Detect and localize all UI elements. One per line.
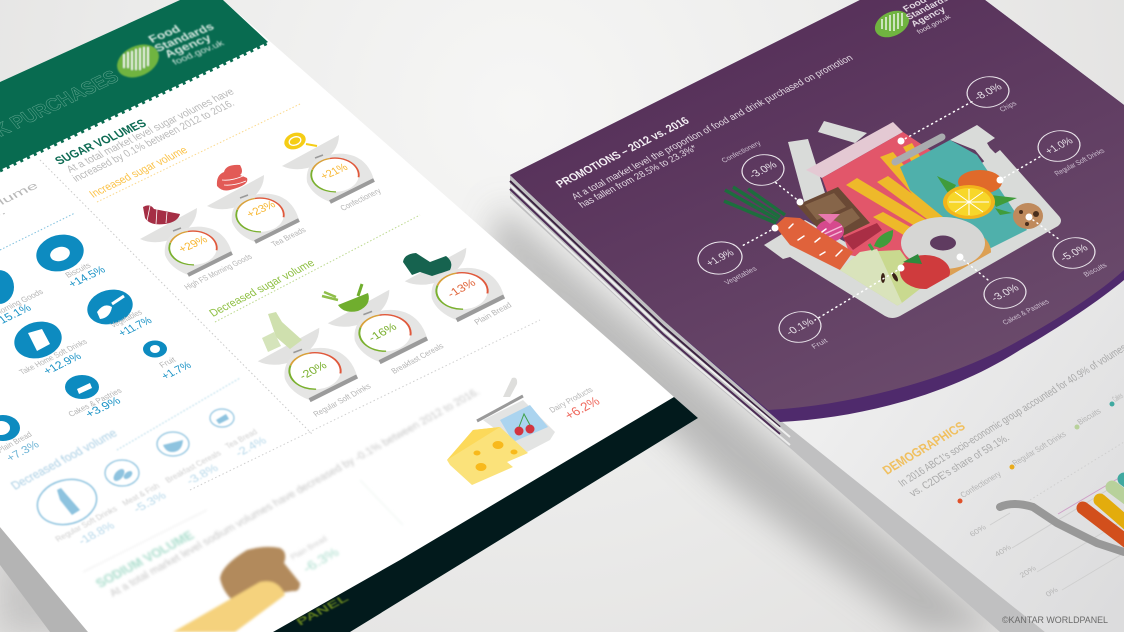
scale: regular soft drinks: Regular Soft Drinks [311, 381, 373, 418]
fruit item [143, 340, 194, 382]
cookie [1013, 203, 1043, 229]
legend [958, 391, 1124, 504]
scale: high FS morning goods: +29% [176, 233, 210, 255]
callout: fruit [771, 306, 830, 350]
callout: vegetables: +1.9% [703, 247, 737, 269]
FSA logo right: food.gov.uk [915, 13, 953, 35]
FSA logo [112, 20, 226, 84]
candy [816, 214, 844, 242]
FSA logo right [871, 0, 953, 42]
callout: chips: Chips [998, 100, 1018, 113]
sodium volume section [83, 386, 482, 632]
take home soft drinks item: Take Home Soft Drinks [17, 337, 89, 376]
left sheet [0, 0, 698, 632]
promotions heading: PROMOTIONS – 2012 vs. 2016 [553, 114, 692, 190]
callout: chips [959, 71, 1018, 113]
scale: confectionery: Confectionery [338, 186, 383, 212]
regular soft drinks item: Regular Soft Drinks [53, 504, 119, 543]
scale: high FS morning goods: High FS Morning Goods [182, 252, 254, 291]
demographics text [896, 342, 1124, 499]
scale: tea breads: Tea Breads [269, 225, 308, 248]
cart handle [1000, 504, 1124, 552]
callout: regular soft drinks [1030, 125, 1106, 177]
regular soft drinks item: -18.8% [76, 519, 117, 547]
fries [846, 143, 943, 235]
take home soft drinks item [10, 317, 89, 377]
FSA logo right: Agency [909, 5, 948, 29]
sodium heading: SODIUM VOLUME [92, 528, 197, 590]
breakfast cereals item: Breakfast Cereals [163, 448, 223, 484]
icon: yogurt pot [477, 378, 555, 452]
plain bread item: +7.3% [4, 438, 42, 464]
dark red wrapper block [843, 223, 882, 250]
shopping basket illustration [724, 121, 1061, 318]
demographics text: vs. C2DE's share of 59.1%. [907, 432, 1012, 499]
callout: fruit: Fruit [810, 337, 830, 350]
dairy products [447, 378, 602, 485]
promotions intro [570, 53, 855, 210]
sodium intro text: At a total market level sodium volumes have decreased by -0.1% between 2012 to 2016. [107, 386, 482, 599]
callout: biscuits: -5.0% [1057, 242, 1091, 264]
demographics section [879, 342, 1124, 598]
tea bread item: -2.4% [233, 434, 269, 459]
column divider [40, 160, 313, 435]
callout: biscuits [1045, 232, 1109, 278]
sugar intro text: At a total market level sugar volumes have [64, 86, 236, 175]
carton cap [895, 137, 942, 162]
carrot greens [724, 187, 785, 223]
callout: cakes and pastries: Cakes & Pastries [1001, 298, 1051, 326]
promotions intro: At a total market level the proportion of food and drink purchased on promotion [570, 53, 855, 202]
chips bag [806, 122, 931, 260]
dairy label: Dairy Products [547, 385, 595, 414]
plain bread value: -6.3% [299, 544, 342, 575]
doughnut [901, 217, 991, 276]
apple [840, 230, 925, 306]
callout: regular soft drinks: +1.0% [1042, 135, 1076, 157]
basket frame [764, 150, 1061, 318]
right stack of sheets [510, 0, 1124, 632]
chart axis labels: 60% [968, 523, 988, 538]
cakes and pastries item: +3.9% [83, 394, 123, 420]
decreased heading: Decreased sugar volume [207, 257, 317, 319]
plain bread label: Plain Bread [288, 534, 329, 561]
scale: breakfast cereals: -16% [366, 320, 399, 344]
callout: biscuits: Biscuits [1082, 261, 1109, 278]
increased food volume column [0, 180, 194, 464]
vegetables item [84, 285, 154, 339]
promotions intro: has fallen from 28.5% to 23.3%* [577, 143, 700, 210]
chart axis labels: 20% [1018, 564, 1038, 579]
legend: Biscuits [1075, 406, 1103, 426]
chart axis labels [968, 523, 1060, 598]
stack edge [510, 175, 1045, 632]
scale: regular soft drinks: -20% [297, 359, 330, 382]
purple hero dark band [510, 0, 1124, 422]
callout: cakes and pastries [976, 272, 1051, 326]
callout: confectionery [720, 139, 792, 191]
callout: vegetables: Vegetables [723, 265, 758, 286]
plain bread item [0, 415, 42, 464]
scale: breakfast cereals [322, 284, 446, 375]
promotion callouts [740, 100, 1060, 320]
legend: Confectionery [958, 469, 1003, 499]
scale: high FS morning goods [140, 205, 254, 291]
chart axis labels: 0% [1044, 586, 1060, 598]
photo credit: ©KANTAR WORLDPANEL [1002, 615, 1108, 626]
purple hero panel [510, 0, 1124, 410]
FSA logo: Standards [152, 20, 217, 54]
vegetables item: Vegetables [108, 308, 144, 329]
callout: vegetables [690, 236, 758, 286]
scale: plain bread: -13% [445, 276, 478, 300]
decreased food heading: Decreased food volume [8, 426, 120, 492]
sheet thickness edge [0, 527, 88, 632]
fruit item: +1.7% [159, 359, 194, 382]
legend: Regular Soft Drinks [1010, 429, 1068, 467]
FSA logo: food.gov.uk [170, 39, 226, 66]
footer dark band [273, 397, 698, 632]
teal drink carton [900, 140, 1027, 250]
meat and fish item: Meat & Fish [120, 481, 161, 507]
citrus and orange [937, 170, 1017, 219]
biscuits item [32, 230, 108, 290]
food volume intro fragment [0, 180, 41, 237]
scale: regular soft drinks [258, 312, 373, 418]
callout: chips: -8.0% [971, 81, 1005, 103]
tea bread item: Tea Bread [223, 427, 259, 450]
fruit item: Fruit [157, 355, 178, 369]
chart bars [1083, 479, 1124, 544]
shadows under sheets [0, 205, 1000, 632]
sugar heading: SUGAR VOLUMES [52, 116, 149, 167]
icon: bread slice [173, 547, 300, 632]
scale: plain bread [403, 248, 513, 326]
scale: confectionery: +21% [318, 161, 350, 182]
FSA logo: Agency [162, 32, 214, 60]
scale: tea breads: +23% [244, 198, 278, 220]
regular soft drinks item [33, 473, 119, 547]
sugar intro text: increased by 0.1% between 2012 to 2016. [70, 98, 237, 184]
vegetables item: +11.7% [116, 314, 154, 339]
FSA logo: Food [146, 23, 183, 45]
biscuits item: Biscuits [63, 261, 93, 279]
morning goods item [0, 270, 45, 330]
footer brand text: PANEL [294, 591, 352, 628]
increased heading: Increased sugar volume [87, 144, 190, 200]
scale: breakfast cereals: Breakfast Cereals [389, 341, 446, 375]
sugar volumes section [52, 86, 540, 490]
basket handles [788, 121, 1060, 230]
chart grid lines [990, 442, 1124, 590]
header serrated edge [0, 43, 268, 171]
breakfast cereals item [157, 432, 223, 487]
tea bread item [210, 409, 269, 459]
meat and fish item: -5.3% [131, 489, 169, 515]
dairy value: +6.2% [561, 394, 602, 422]
scale: confectionery [282, 130, 383, 212]
scale: plain bread: Plain Bread [472, 300, 513, 326]
biscuits item: +14.5% [66, 263, 108, 290]
take home soft drinks item: +12.9% [41, 350, 84, 377]
meat and fish item [105, 460, 169, 515]
green header band [0, 0, 268, 170]
scale: tea breads [207, 165, 308, 248]
cakes and pastries item: Cakes & Pastries [66, 386, 124, 418]
decreased food volume section [8, 378, 269, 547]
sheet paper [0, 0, 698, 632]
chart axis labels: 40% [993, 543, 1013, 558]
callout: confectionery: -3.0% [746, 159, 780, 181]
demographics heading: DEMOGRAPHICS [879, 419, 968, 477]
strawberry [900, 254, 950, 289]
sugar intro text [64, 86, 237, 184]
chocolate bar [797, 187, 870, 236]
callout: cakes and pastries: -3.0% [988, 282, 1022, 304]
page [510, 0, 1124, 632]
callout: fruit: -0.1% [783, 316, 817, 338]
breakfast cereals item: -3.8% [184, 461, 221, 487]
carrot [775, 217, 853, 270]
callout anchor dots [772, 138, 1032, 272]
callout: confectionery: Confectionery [720, 139, 763, 164]
icon: cheese [447, 427, 528, 485]
